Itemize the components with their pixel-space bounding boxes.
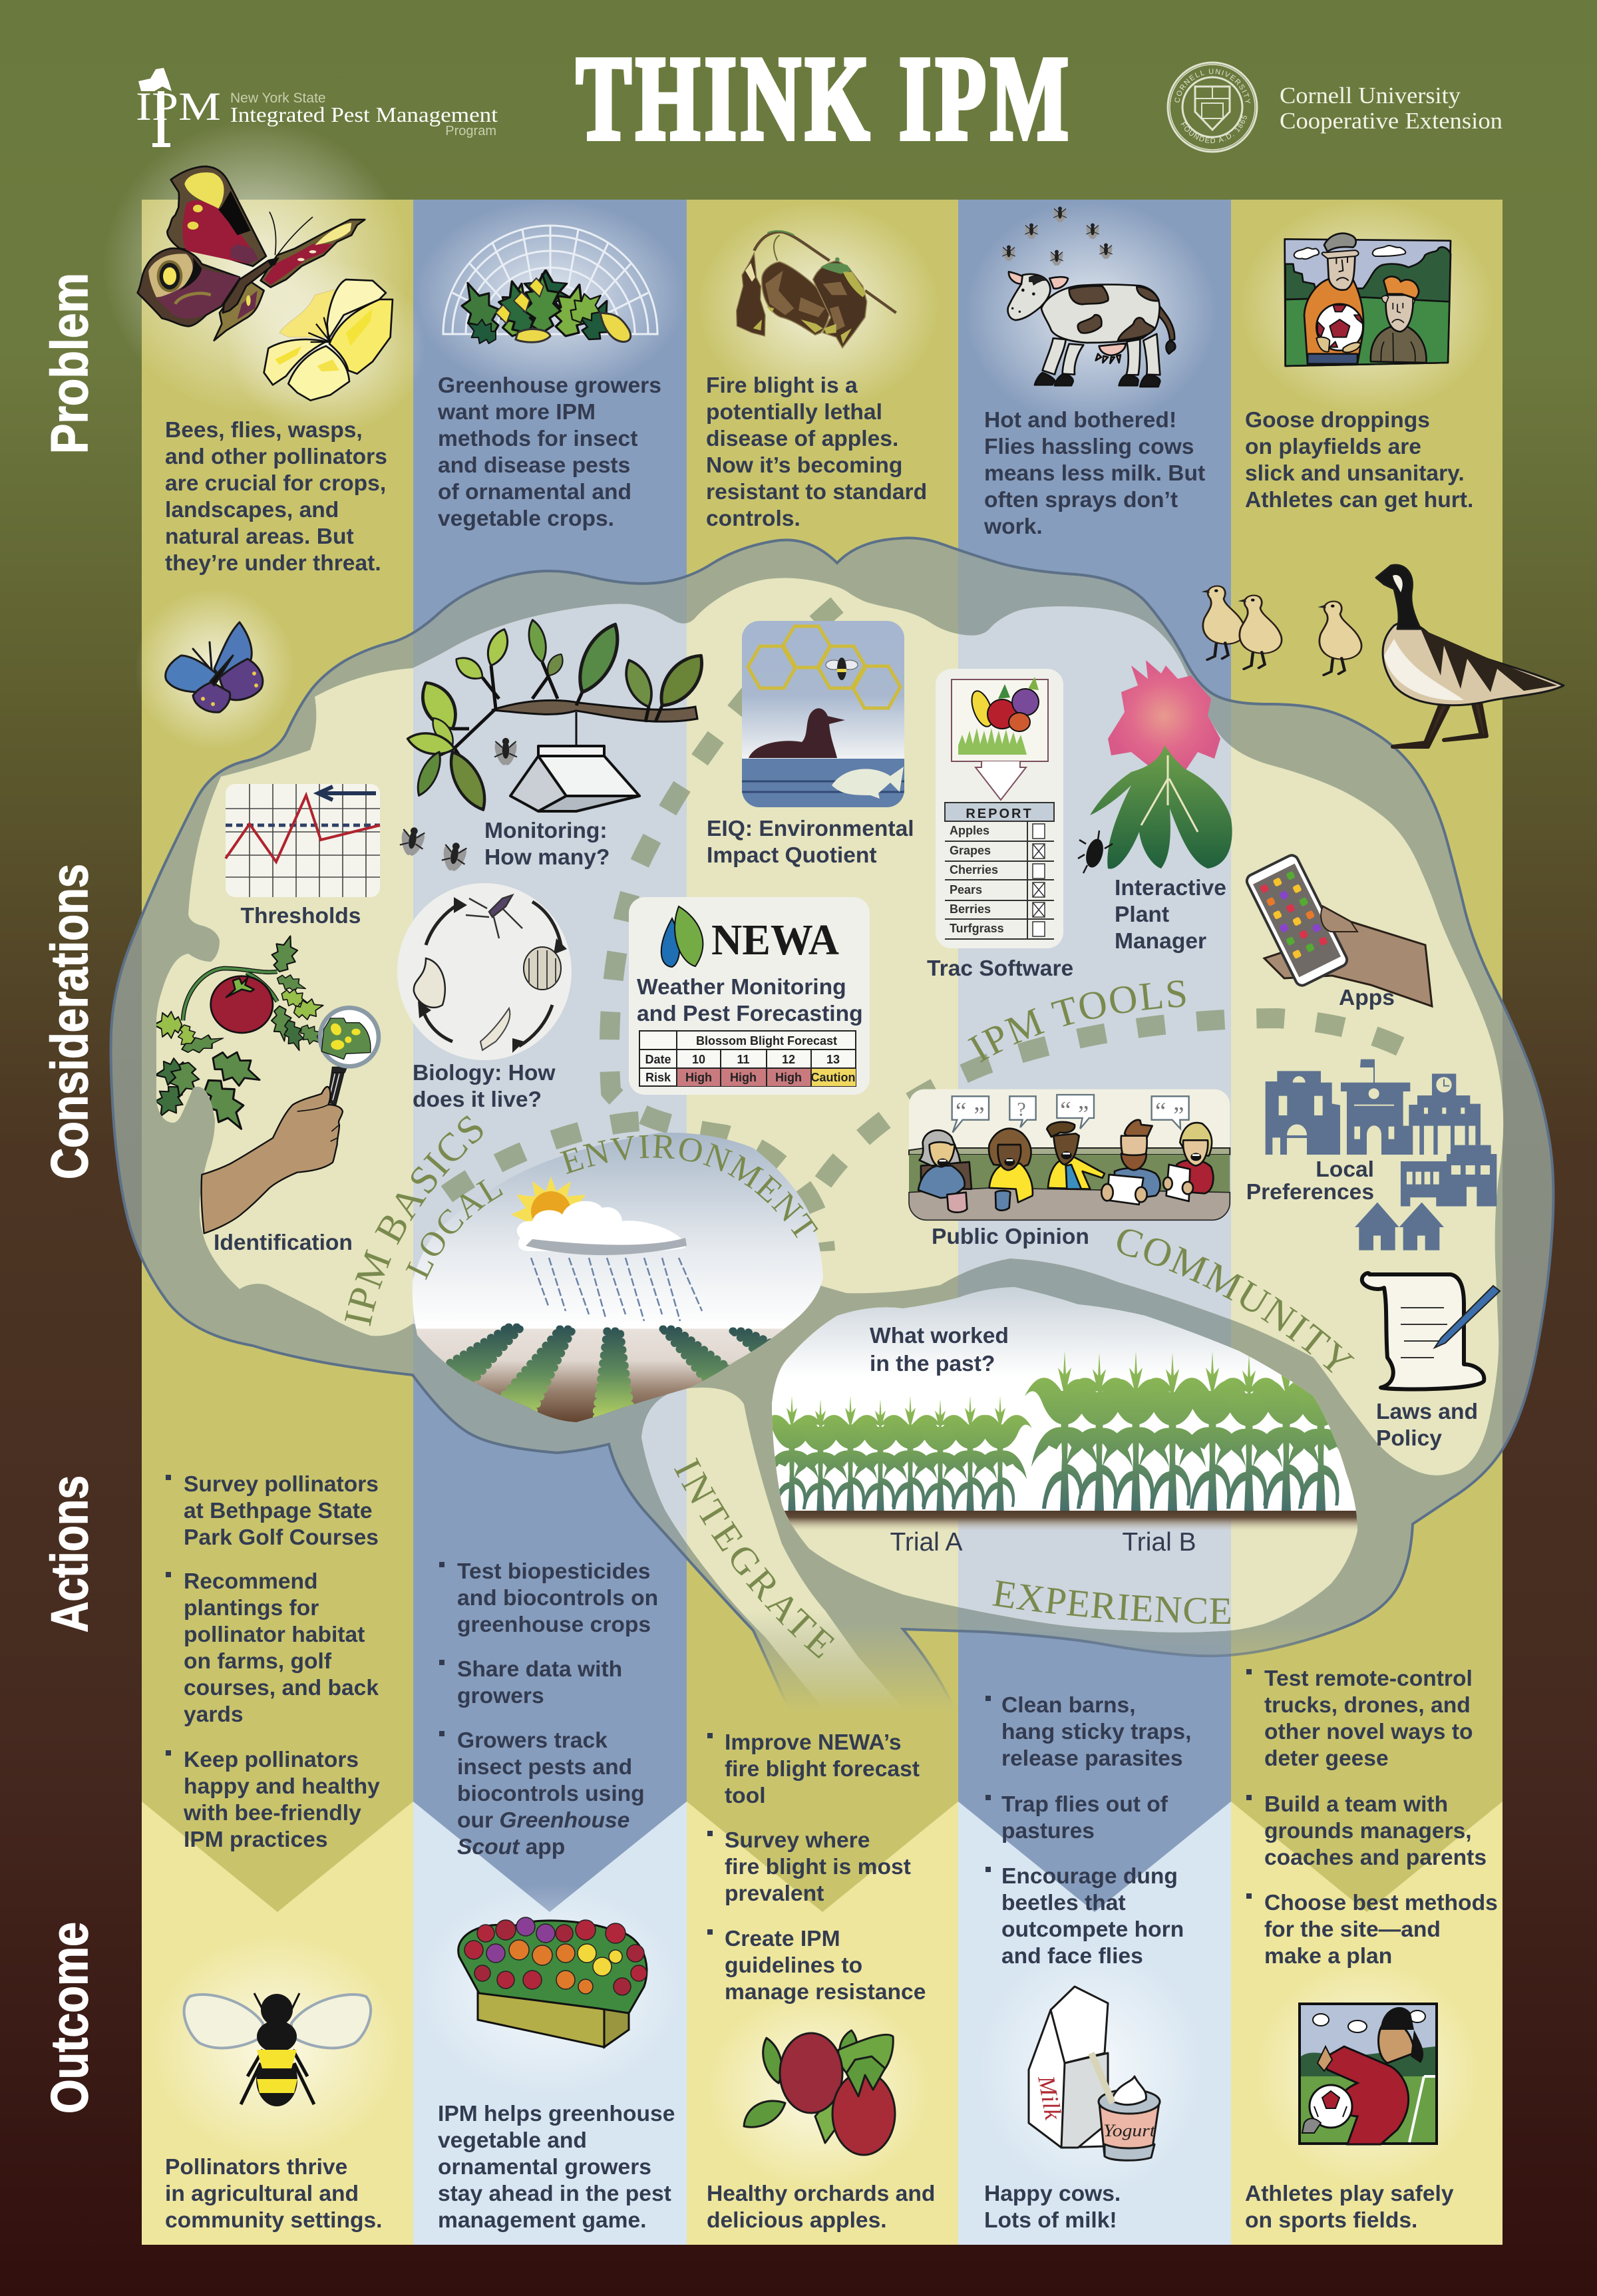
text: Biology label: Biology: How [413, 1061, 556, 1085]
text: Trial labels: Trial B [1122, 1528, 1196, 1557]
text: actions column 1: on farms, golf [184, 1649, 332, 1674]
icon: tomato plant [149, 932, 326, 1138]
text: actions column 1: Park Golf Courses [184, 1525, 379, 1550]
text: Interactive Plant Manager label: Manager [1115, 929, 1206, 954]
text: outcome column 2: ornamental growers [438, 2155, 651, 2180]
speech bubbles: “ [956, 1097, 966, 1125]
person 3 [1047, 1122, 1105, 1189]
text: NEWA description: Weather Monitoring [637, 975, 846, 1000]
text: problem column 1: natural areas. But [165, 524, 354, 549]
text: actions column 1: IPM practices [184, 1827, 327, 1852]
text: outcome column 2: management game. [438, 2208, 647, 2233]
text: problem column 2: Greenhouse growers [438, 373, 661, 398]
text: actions column 2: greenhouse crops [457, 1613, 651, 1637]
speech bubbles: “ [1060, 1096, 1071, 1123]
text: actions column 1: happy and healthy [184, 1774, 380, 1799]
text: actions column 5: grounds managers, [1264, 1819, 1472, 1843]
text: actions column 5: trucks, drones, and [1264, 1693, 1471, 1718]
text: problem column 1: landscapes, and [165, 498, 339, 522]
text: outcome column 2: vegetable and [438, 2128, 587, 2153]
text: problem column 1: and other pollinators [165, 445, 387, 469]
row labels: Problem [40, 273, 98, 454]
text: Trial labels [890, 1528, 1196, 1557]
panel: integrate stem [641, 1388, 905, 1710]
icon: milk carton: Milk [1033, 2073, 1067, 2122]
text: actions column 5: for the site—and [1264, 1917, 1441, 1942]
text: problem column 2: vegetable crops. [438, 506, 614, 531]
text: Identification label: Identification [214, 1231, 353, 1255]
speech bubbles [952, 1095, 1189, 1133]
text: outcome column 5: Athletes play safely [1245, 2182, 1454, 2206]
panel: experience trial lobe [765, 1287, 1364, 1632]
text: problem column 5: slick and unsanitary. [1245, 461, 1465, 486]
panel: Trac software card [936, 669, 1063, 948]
icon: peacock butterfly [138, 166, 365, 341]
text: outcome column 3: delicious apples. [707, 2208, 887, 2233]
text: problem column 1: Bees, flies, wasps, [165, 418, 363, 443]
panel: dashed IPM paths [445, 605, 1411, 1251]
curved section titles: ENVIRONMENT [560, 1135, 818, 1238]
text: outcome column 4: Lots of milk! [984, 2208, 1117, 2233]
panel: public opinion scene [909, 1089, 1230, 1220]
text: problem column 4: Flies hassling cows [984, 435, 1194, 459]
icon: flies near trap [396, 738, 519, 874]
text: actions column 3: guidelines to [725, 1953, 862, 1978]
text: problem column 2: methods for insect [438, 427, 637, 451]
table: blossom blight forecast: Risk [645, 1071, 671, 1084]
icon: flies above cow [1001, 206, 1114, 266]
text: actions column 3: Create IPM [725, 1927, 840, 1951]
text: actions column 2: and biocontrols on [457, 1586, 658, 1611]
icon: yellow flower [264, 280, 393, 401]
icon: yogurt cup: Yogurt [1103, 2121, 1156, 2140]
table: blossom blight forecast: High [685, 1071, 712, 1084]
icon: crop rows [447, 1327, 772, 1418]
text: problem column 5: Athletes can get hurt. [1245, 488, 1473, 512]
logo: Cornell seal: CORNELL UNIVERSITY [1174, 69, 1251, 104]
text: actions column 5 [1246, 1666, 1498, 1969]
text: problem column 3: potentially lethal [706, 400, 882, 425]
icon: flower box [458, 1917, 647, 2047]
icon: magnifier and hand [202, 1008, 379, 1233]
person 4 [1101, 1120, 1160, 1205]
text: outcome column 4: Happy cows. [984, 2182, 1121, 2206]
icon: scroll and pen [1362, 1273, 1500, 1390]
table: blossom blight forecast: High [730, 1071, 757, 1084]
text: outcome column 1: in agricultural and [165, 2182, 359, 2206]
icon: athlete playing safely [1300, 2004, 1437, 2144]
icon: town buildings [1266, 1059, 1497, 1250]
text: problem column 2: of ornamental and [438, 480, 631, 504]
text: Laws and Policy label: Laws and [1376, 1400, 1478, 1424]
text: actions column 4: pastures [1001, 1819, 1095, 1843]
icon: bumble bee [184, 1993, 371, 2106]
logo: Cornell seal [1167, 61, 1258, 153]
text: NEWA description: and Pest Forecasting [637, 1002, 863, 1026]
text: actions column 2: Share data with [457, 1657, 622, 1682]
logo text: Cornell University Cooperative Extension: Cooperative Extension [1280, 108, 1503, 134]
text: Local Preferences label: Local [1316, 1157, 1374, 1182]
icon: fruit picture [952, 677, 1048, 761]
logo text: NEWA [711, 916, 839, 964]
table: blossom blight forecast: Blossom Blight Forecast [696, 1034, 837, 1048]
text: Monitoring label: How many? [484, 845, 610, 870]
panel: NEWA card [629, 897, 870, 1095]
title: THINK IPM [576, 32, 1073, 165]
icon: goslings [1201, 586, 1361, 675]
icon: dairy cow [1008, 272, 1175, 387]
text: problem column 3: Now it’s becoming [706, 453, 902, 478]
text: actions column 4: beetles that [1001, 1891, 1126, 1915]
icon: smartphone with hand [1244, 853, 1432, 1006]
text: problem column 3: disease of apples. [706, 427, 898, 451]
table: blossom blight forecast: Caution [810, 1071, 856, 1084]
text: Apps label: Apps [1339, 986, 1395, 1010]
text: Interactive Plant Manager label: Plant [1115, 902, 1169, 927]
text: actions column 3: fire blight is most [725, 1855, 911, 1879]
person 5 [1163, 1123, 1213, 1201]
table: report: Pears [950, 883, 982, 896]
text: actions column 5: other novel ways to [1264, 1720, 1473, 1744]
icon: EIQ card with bee, hexagons, loon and fish [742, 621, 904, 812]
text: actions column 5: Test remote-control [1264, 1666, 1473, 1691]
text: outcome column 2: stay ahead in the pest [438, 2182, 671, 2206]
logo: New York State IPM [136, 68, 498, 147]
icon: milk carton [1029, 1987, 1108, 2148]
text: outcome column 5: on sports fields. [1245, 2208, 1417, 2233]
text: actions column 5: make a plan [1264, 1944, 1392, 1969]
text: EIQ label: EIQ: Environmental [707, 817, 914, 841]
logo text: Cornell University Cooperative Extension [1280, 83, 1503, 134]
text: actions column 2 [439, 1559, 658, 1859]
curved section titles: EXPERIENCE [992, 1580, 1230, 1624]
logo: New York State IPM: New York State [230, 91, 326, 106]
curved section titles: IPM BASICS [345, 1115, 483, 1326]
text: actions column 2: Test biopesticides [457, 1559, 650, 1584]
icon: sun, cloud and rain [511, 1177, 702, 1321]
text: outcome column 3: Healthy orchards and [707, 2182, 935, 2206]
table: report: REPORT [966, 807, 1033, 821]
text: actions column 4 [985, 1693, 1192, 1969]
text: problem column 2: want more IPM [437, 400, 596, 425]
table: report: Turfgrass [950, 922, 1004, 935]
text: outcome column 1: community settings. [165, 2208, 383, 2233]
text: problem column 1: are crucial for crops, [165, 471, 386, 496]
text: actions column 2: Scout app [457, 1835, 565, 1859]
icon: rhododendron [1090, 660, 1232, 869]
curved section titles: IPM TOOLS [968, 980, 1186, 1063]
icon: healthy apples [744, 2029, 895, 2155]
text: actions column 2: Growers track [457, 1728, 608, 1753]
person 2 [989, 1129, 1033, 1203]
text: problem column 4: work. [983, 514, 1043, 539]
table: report: Apples [950, 824, 989, 837]
icon: goose-problem scene with worried people [1285, 234, 1451, 366]
text: What worked label: in the past? [870, 1352, 995, 1376]
text: Trac label: Trac Software [927, 956, 1073, 981]
text: actions column 5: Choose best methods [1264, 1891, 1498, 1915]
row labels: Actions [40, 1475, 98, 1632]
text: actions column 2: our Greenhouse [457, 1808, 629, 1833]
curved section titles [345, 980, 1355, 1658]
text: problem column 2: and disease pests [438, 453, 630, 478]
text: actions column 4: Encourage dung [1001, 1864, 1178, 1889]
text: Local Preferences label: Preferences [1246, 1180, 1374, 1205]
table: report [945, 803, 1054, 939]
chart: thresholds [226, 784, 380, 897]
text: problem column 5: Goose droppings [1245, 408, 1430, 433]
icon: monitoring branch with leaves [406, 618, 712, 815]
text: actions column 2: insect pests and [457, 1755, 632, 1780]
speech bubbles: ” [1078, 1101, 1089, 1128]
text: actions column 1: yards [184, 1702, 244, 1727]
panel: IPM brain outer shape [111, 538, 1553, 1714]
row labels [40, 273, 98, 2114]
icon: Canada goose [1376, 565, 1564, 747]
panel: brain inner region [156, 578, 1503, 1475]
icon: insect trap [510, 712, 639, 811]
text: actions column 1 [166, 1472, 380, 1852]
table: blossom blight forecast [639, 1031, 856, 1086]
icon: yogurt cup [1091, 2053, 1160, 2160]
text: Public Opinion label: Public Opinion [932, 1225, 1089, 1249]
logo text: Cornell University Cooperative Extension: Cornell University [1280, 83, 1461, 108]
logo: Cornell seal: FOUNDED A.D. 1865 [1180, 115, 1247, 144]
text: problem column 3: Fire blight is a [706, 373, 858, 398]
row labels: Outcome [40, 1922, 98, 2114]
speech bubbles: ? [1017, 1099, 1026, 1121]
text: actions column 3: Improve NEWA’s [725, 1730, 902, 1755]
speech bubbles: “ [1155, 1097, 1166, 1125]
text: actions column 1: courses, and back [184, 1676, 379, 1700]
chart: corn Trial B [1025, 1351, 1361, 1511]
text: actions column 1: Recommend [184, 1569, 318, 1594]
person 1 [918, 1130, 972, 1198]
text: problem column 5: on playfields are [1245, 435, 1421, 459]
text: actions column 2: growers [457, 1684, 544, 1708]
row labels: Considerations [40, 864, 98, 1179]
text: actions column 3: tool [725, 1784, 766, 1808]
table: blossom blight forecast: 12 [782, 1053, 795, 1066]
table: blossom blight forecast: Date [645, 1053, 671, 1066]
speech bubbles: ” [1173, 1101, 1184, 1129]
text: Laws and Policy label: Policy [1376, 1426, 1442, 1451]
text: actions column 3: prevalent [725, 1881, 824, 1906]
text: EIQ label: Impact Quotient [707, 843, 877, 868]
table: blossom blight forecast: 10 [692, 1053, 705, 1066]
icon: NEWA drop and leaf [661, 906, 703, 967]
curved section titles: INTEGRATE [674, 1457, 834, 1658]
table: blossom blight forecast: 11 [737, 1053, 750, 1066]
icon: lifecycle circle [397, 883, 572, 1060]
text: problem column 3: resistant to standard [706, 480, 927, 504]
text: problem column 1: they’re under threat. [165, 551, 381, 576]
panel: local environment lobe [413, 1133, 823, 1422]
icon: beetle [1078, 831, 1113, 873]
text: actions column 5: deter geese [1264, 1746, 1389, 1771]
text: actions column 3: manage resistance [725, 1980, 926, 2005]
text: Biology label: does it live? [413, 1087, 542, 1112]
text: problem column 4: means less milk. But [984, 461, 1205, 486]
text: outcome column 2: IPM helps greenhouse [438, 2102, 675, 2126]
text: actions column 5: Build a team with [1264, 1792, 1448, 1817]
logo: New York State IPM: IPM [136, 85, 221, 128]
text: actions column 1: pollinator habitat [184, 1623, 365, 1647]
text: problem column 4: often sprays don’t [984, 488, 1178, 512]
table: report: Cherries [950, 863, 998, 876]
panel: five column bands [142, 200, 1503, 2245]
text: actions column 3: fire blight forecast [725, 1757, 920, 1782]
text: actions column 4: Clean barns, [1001, 1693, 1136, 1718]
chart: corn Trial A [760, 1396, 1032, 1511]
text: actions column 1: plantings for [184, 1596, 319, 1621]
text: Trial labels: Trial A [890, 1528, 963, 1557]
text: actions column 1: Keep pollinators [184, 1748, 359, 1772]
table: report: Berries [950, 902, 991, 916]
logo: New York State IPM: Program [445, 124, 496, 138]
text: actions column 3 [707, 1730, 926, 2005]
arrow: to report [976, 761, 1026, 800]
text: actions column 4: Trap flies out of [1001, 1792, 1168, 1817]
text: actions column 3: Survey where [725, 1828, 870, 1853]
text: problem column 4: Hot and bothered! [984, 408, 1176, 433]
text: actions column 1: Survey pollinators [184, 1472, 379, 1497]
logo: New York State IPM: Integrated Pest Management [230, 102, 498, 126]
mugs [947, 1191, 1010, 1213]
text: problem column 3: controls. [706, 506, 800, 531]
text: Thresholds label: Thresholds [241, 904, 361, 928]
text: Monitoring label: Monitoring: [484, 819, 608, 843]
text: actions column 1: with bee-friendly [183, 1801, 361, 1825]
text: Interactive Plant Manager label: Interactive [1115, 876, 1226, 900]
text: actions column 4: release parasites [1001, 1746, 1183, 1771]
table: blossom blight forecast: 13 [826, 1053, 840, 1066]
text: actions column 5: coaches and parents [1264, 1845, 1487, 1870]
table: blossom blight forecast: High [775, 1071, 802, 1084]
icon: fire blight apples [737, 231, 896, 348]
icon: greenhouse with plants [443, 226, 657, 349]
text: actions column 4: hang sticky traps, [1001, 1720, 1192, 1744]
curved section titles: LOCAL [406, 1179, 503, 1280]
text: actions column 2: biocontrols using [457, 1782, 645, 1806]
text: actions column 4: and face flies [1001, 1944, 1143, 1969]
text: What worked label: What worked [870, 1324, 1009, 1348]
text: outcome column 1: Pollinators thrive [165, 2155, 347, 2180]
table: report: Grapes [950, 844, 991, 857]
text: actions column 4: outcompete horn [1001, 1917, 1184, 1942]
illustration glows [103, 120, 1494, 2196]
icon: blue butterfly [166, 622, 263, 712]
text: actions column 1: at Bethpage State [184, 1499, 373, 1523]
speech bubbles: ” [974, 1101, 985, 1129]
curved section titles: COMMUNITY [1117, 1229, 1355, 1373]
